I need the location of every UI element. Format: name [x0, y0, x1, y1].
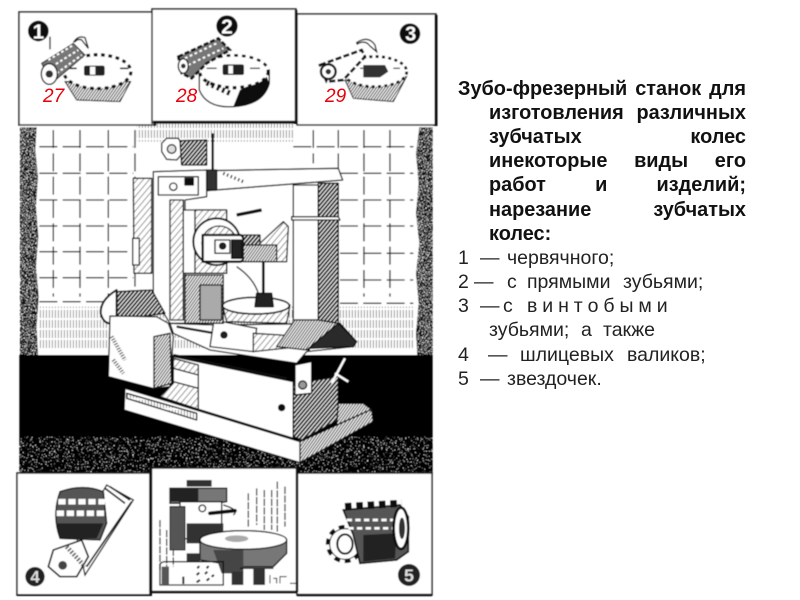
spindle head [170, 480, 235, 550]
gearbox [295, 362, 312, 395]
list item 3: в и н т о б ы м и [527, 295, 668, 317]
signature [270, 575, 297, 583]
right edge speckle [417, 127, 433, 355]
base body [173, 357, 293, 438]
machine bed [170, 323, 357, 363]
background: tiled wall and black floor [19, 122, 433, 474]
top arm [207, 168, 343, 191]
list item 2: прямыми [527, 271, 610, 293]
numeral circle 1: 1 [33, 20, 44, 43]
dark lower column [185, 275, 223, 323]
numeral circle 3: 3 [405, 24, 416, 46]
list item 5: — [480, 368, 500, 390]
list item 3 continued: зубьями; [489, 319, 569, 341]
list item 3: 3 [458, 295, 469, 317]
handle [332, 358, 348, 383]
hob drum [56, 487, 107, 540]
list item 3: с [503, 295, 513, 317]
dark left edge [20, 127, 39, 355]
gear [199, 56, 269, 107]
panel number 28: 28 [175, 86, 198, 107]
wainscot [40, 307, 413, 350]
left edge speckle [20, 127, 37, 355]
spindle support [243, 235, 260, 260]
list item 3 [458, 295, 668, 317]
list item 3 continued: а [581, 319, 592, 341]
panel: machining detail [150, 468, 297, 592]
list item 3 continued [489, 319, 655, 341]
dial [193, 218, 240, 265]
list item 2: 2 [458, 271, 469, 293]
lower column and base [160, 553, 273, 585]
list item 2 [458, 271, 703, 293]
lever handle [237, 210, 262, 215]
rear column [293, 185, 318, 320]
spline shaft [77, 485, 133, 575]
panel 2: spur gear [152, 9, 296, 124]
work table [200, 531, 287, 573]
numeral circle 5: 5 [404, 566, 414, 586]
numeral circle 4: 4 [30, 568, 40, 587]
list item 2: с [507, 271, 517, 293]
list item 1: червячного; [507, 247, 614, 269]
list item 2: — [474, 271, 494, 293]
list item 5: 5 [458, 368, 469, 390]
motion hatching [160, 482, 285, 570]
hob end collar [48, 540, 88, 577]
chips [183, 566, 214, 584]
sprocket bore [337, 534, 353, 554]
rotary table [223, 305, 290, 323]
right leg [293, 377, 338, 440]
tool head [203, 235, 243, 262]
list item 4: 4 [458, 344, 469, 366]
list item 4 [458, 344, 706, 366]
coolant pipe [237, 267, 260, 300]
heading line 7: колес: [489, 223, 551, 245]
curved arrow 3 [357, 39, 377, 52]
saddle block [210, 320, 257, 352]
column head [158, 177, 198, 195]
dark right edge [416, 127, 433, 355]
panel 5: sprocket [297, 473, 432, 595]
sprocket [328, 527, 362, 561]
heading line 3: зубчатых колес [489, 126, 746, 148]
side scale [133, 178, 152, 273]
list item 4: валиков; [627, 344, 706, 366]
list item 1: — [480, 247, 500, 269]
list item 3: — [480, 295, 500, 317]
heading line 4: инекоторые виды его [489, 150, 746, 172]
heading line 1: Зубо-фрезерный станок для [458, 78, 746, 100]
black floor [19, 355, 433, 474]
tray base [124, 388, 373, 463]
machine [101, 133, 373, 463]
motor housing [108, 316, 173, 389]
base nameplate [173, 368, 198, 388]
hob cutter [343, 505, 408, 563]
list item 2: зубьями; [623, 271, 703, 293]
hob cutter [178, 38, 230, 78]
list item 5 [458, 368, 602, 390]
gear [343, 57, 407, 102]
list item 5: звездочек. [507, 368, 602, 390]
panel number 27: 27 [42, 86, 66, 107]
panel 1: worm gear [19, 12, 155, 126]
list item 3 continued: также [603, 319, 655, 341]
panel number 29: 29 [324, 86, 347, 107]
motor on top [162, 138, 183, 160]
hob carriage [183, 210, 227, 273]
heading line 2: изготовления различных [489, 102, 746, 124]
tile grid [39, 130, 413, 303]
list item 1 [458, 247, 614, 269]
floor speckle [19, 437, 433, 474]
list item 4: — [488, 344, 508, 366]
list item 1: 1 [458, 247, 469, 269]
heading line 6: нарезание зубчатых [489, 199, 746, 221]
panel 4: spline shaft [17, 473, 151, 596]
main column [153, 170, 207, 323]
upper hatch behind machine [137, 122, 293, 142]
panel 3: helical gear [297, 14, 436, 126]
arrow 1 [48, 37, 52, 49]
curved arrow 1 [74, 37, 88, 48]
left motor [117, 290, 165, 320]
gear [64, 55, 131, 102]
numeral circle 2: 2 [221, 15, 233, 38]
list item 4: шлицевых [520, 344, 614, 366]
hob cutter [41, 43, 85, 84]
column bottom dark foot [277, 320, 338, 350]
hob cutter [320, 50, 365, 82]
heading line 5: работ и изделий; [489, 174, 746, 196]
